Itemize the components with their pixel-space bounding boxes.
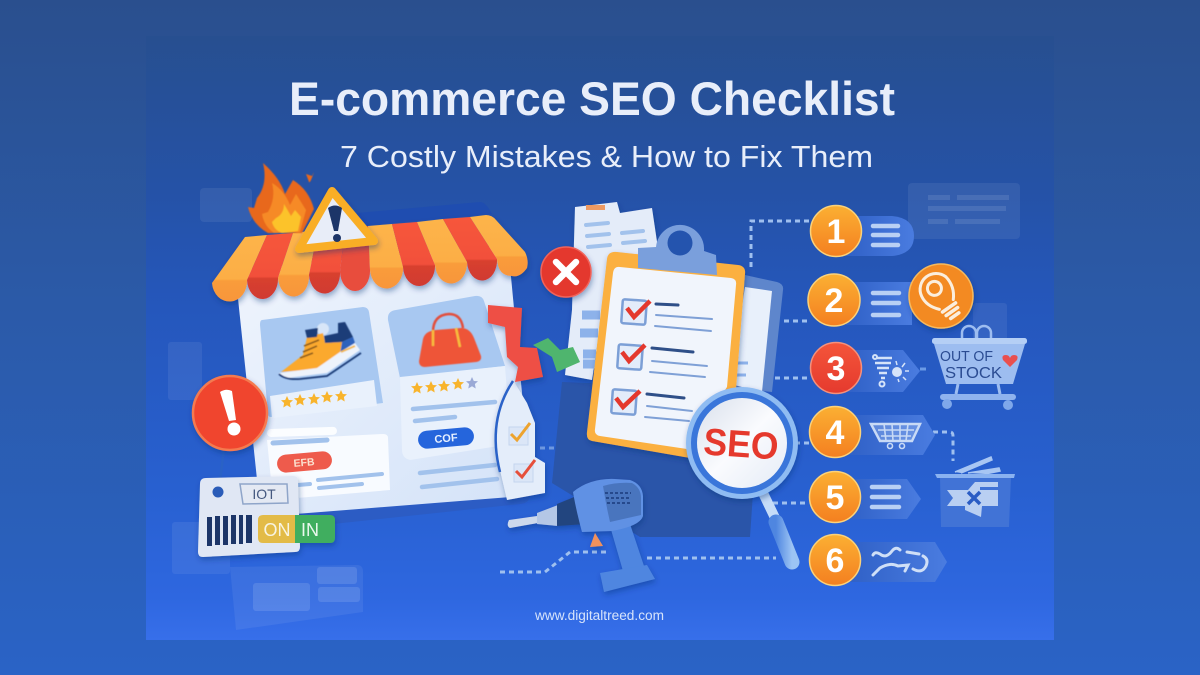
step 6: [810, 534, 947, 586]
website url: www.digitaltreed.com: [534, 608, 664, 623]
magnifying glass SEO: [686, 387, 798, 562]
step 4: 4: [826, 414, 845, 452]
icon: lightbulb badge: [909, 264, 973, 328]
storefront roof back: [357, 202, 492, 226]
subtitle: 7 Costly Mistakes & How to Fix Them: [340, 139, 873, 174]
alert circle with connector: [193, 376, 267, 490]
label: OUT OF STOCK: [940, 349, 1003, 382]
toggle: ON IN: IN: [301, 520, 319, 540]
clipboard: [587, 225, 783, 458]
clipboard page: [595, 267, 736, 449]
checklist row 1: [621, 299, 712, 331]
toggle: ON IN: ON: [264, 520, 290, 540]
dotted connectors: [500, 221, 953, 572]
clipboard orange board: [587, 252, 745, 458]
shoe product card: [260, 307, 383, 418]
ghost panels in background: [168, 183, 1020, 630]
step 5: [810, 472, 921, 522]
arrow: red zigzag: [488, 305, 543, 382]
checklist row 2: [617, 344, 707, 377]
step 1: [810, 206, 914, 256]
step 3: 3: [827, 350, 845, 388]
icon: handbag: [419, 314, 481, 367]
striped awning: [212, 215, 528, 302]
arrow: green zigzag: [533, 338, 580, 372]
clipboard clip: [638, 225, 717, 275]
icon: box with torn ticket: [935, 457, 1015, 527]
storefront body: [235, 245, 531, 516]
icon: shoe: [279, 322, 361, 379]
button: COF: [417, 427, 475, 449]
main panel background: [146, 36, 1054, 640]
button: COF: COF: [434, 432, 458, 446]
lower left product card: [267, 427, 390, 498]
label: OUT OF STOCK: OUT OF: [940, 349, 993, 365]
magnifier handle: [764, 495, 792, 562]
barcode: [207, 515, 252, 546]
back receipt papers: [565, 202, 660, 380]
storefront base shadow: [262, 450, 530, 527]
label: OUT OF STOCK: STOCK: [945, 365, 1003, 382]
storefront: [212, 202, 531, 527]
icon: flame: [248, 163, 314, 233]
icon: out of stock cart: [932, 326, 1027, 410]
step 4: [810, 406, 935, 458]
toggle: ON IN: [258, 515, 335, 543]
label: IOT: IOT: [252, 486, 276, 502]
icon: warning triangle: [299, 191, 374, 249]
icon: funnel cart and bulb: [873, 355, 909, 386]
SEO lens text: SEO: [702, 421, 780, 469]
icon: power drill: [508, 479, 655, 592]
icon: red cross button: [541, 247, 591, 297]
icon: heart: [1002, 355, 1018, 367]
step 2: 2: [825, 282, 843, 320]
title: E-commerce SEO Checklist: [289, 72, 895, 125]
step 3: [810, 342, 926, 394]
icon: shopping cart: [871, 424, 920, 448]
rating stars: four and a half: [411, 377, 478, 394]
handbag product card: [388, 296, 511, 487]
barcode tag: [198, 476, 335, 557]
step 2: [808, 274, 912, 326]
icon: route squiggles: [873, 548, 927, 575]
checklist row 3: [611, 389, 692, 421]
button: EFB: EFB: [293, 456, 315, 470]
checklist tag: [496, 380, 545, 500]
step 1: 1: [827, 213, 845, 251]
rating stars: five: [281, 390, 347, 408]
step 5: 5: [826, 479, 844, 517]
clipboard back page: [730, 275, 783, 392]
step 6: 6: [826, 542, 844, 580]
dark board behind clipboard: [552, 382, 760, 537]
